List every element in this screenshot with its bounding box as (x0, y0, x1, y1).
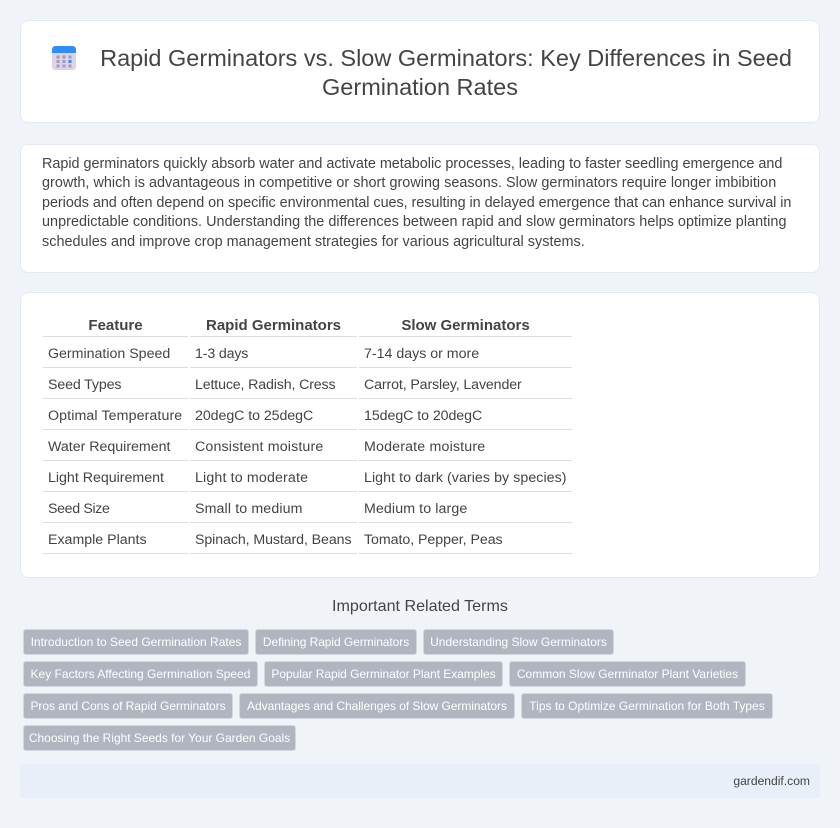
row: light requirement: Light to moderate (195, 470, 308, 486)
chip: Defining Rapid Germinators (263, 635, 409, 649)
row: water requirement (43, 439, 572, 461)
text block: introduction: unpredictable conditions. Understanding the differences between rapid and slow germinators helps optimize planting (42, 214, 786, 230)
chip (23, 661, 258, 687)
row: optimal temperature: Optimal Temperature (48, 408, 182, 424)
row: seed types: Lettuce, Radish, Cress (195, 377, 335, 393)
chip: Key Factors Affecting Germination Speed (31, 667, 250, 681)
text block: introduction (42, 156, 791, 250)
row: light requirement (43, 470, 572, 492)
row: optimal temperature (43, 408, 572, 430)
row: seed size: Seed Size (48, 501, 110, 517)
chip: Common Slow Germinator Plant Varieties (517, 667, 738, 681)
footer (20, 764, 820, 798)
chip (23, 725, 296, 751)
icon: calendar (52, 46, 76, 70)
panel: related term chips (23, 629, 773, 751)
chip (509, 661, 746, 687)
chip: Understanding Slow Germinators (430, 635, 607, 649)
row: light requirement: Light Requirement (48, 470, 164, 486)
row: seed types (43, 377, 572, 399)
text block: introduction: periods and often depend on specific environmental cues, resulting in delayed emergence that can enhance survival in (42, 195, 791, 211)
row: seed size: Medium to large (364, 501, 467, 517)
table header (43, 317, 572, 337)
row: optimal temperature: 15degC to 20degC (364, 408, 482, 424)
row: germination speed: 7-14 days or more (364, 346, 479, 362)
chip (239, 693, 515, 719)
title: Germination Rates (322, 74, 518, 100)
table header: Rapid Germinators (206, 317, 341, 334)
row: water requirement: Consistent moisture (195, 439, 323, 455)
title: Rapid Germinators vs. Slow Germinators: Key Differences in Seed (100, 45, 792, 71)
row: example plants: Example Plants (48, 532, 147, 548)
chip: Pros and Cons of Rapid Germinators (30, 699, 226, 713)
row: seed size (43, 501, 572, 523)
row: seed types: Carrot, Parsley, Lavender (364, 377, 522, 393)
panel: comparison table (20, 292, 820, 578)
row: germination speed: Germination Speed (48, 346, 170, 362)
panel: header (20, 20, 820, 123)
chip: Introduction to Seed Germination Rates (31, 635, 241, 649)
panel: introduction (20, 144, 820, 273)
row: seed types: Seed Types (48, 377, 121, 393)
row: example plants (43, 532, 572, 554)
row: example plants: Spinach, Mustard, Beans (195, 532, 351, 548)
chip (521, 693, 773, 719)
text block: introduction: schedules and improve crop management strategies for various agricultural systems. (42, 234, 585, 250)
text block: introduction: Rapid germinators quickly absorb water and activate metabolic processes, leading to faster seedling emergence and (42, 156, 782, 172)
row: germination speed (43, 346, 572, 368)
chip (255, 629, 417, 655)
row: optimal temperature: 20degC to 25degC (195, 408, 313, 424)
footer text: gardendif.com (733, 774, 810, 788)
chip (423, 629, 614, 655)
chip (23, 693, 233, 719)
text block: introduction: growth, which is advantageous in competitive or short growing seasons. Slow germinators require longer imbibition (42, 175, 776, 191)
chip: Choosing the Right Seeds for Your Garden Goals (29, 731, 290, 745)
title (100, 45, 792, 100)
chip: Popular Rapid Germinator Plant Examples (271, 667, 496, 681)
chip: Tips to Optimize Germination for Both Types (529, 699, 765, 713)
chip (23, 629, 249, 655)
table header: Slow Germinators (401, 317, 530, 334)
chip: Advantages and Challenges of Slow Germinators (247, 699, 507, 713)
table header: Feature (88, 317, 143, 334)
heading: important related terms: Important Related Terms (332, 597, 508, 615)
row: water requirement: Moderate moisture (364, 439, 485, 455)
row: germination speed: 1-3 days (195, 346, 248, 362)
row: light requirement: Light to dark (varies by species) (364, 470, 567, 486)
row: example plants: Tomato, Pepper, Peas (364, 532, 503, 548)
chip (264, 661, 503, 687)
row: water requirement: Water Requirement (48, 439, 170, 455)
row: seed size: Small to medium (195, 501, 303, 517)
